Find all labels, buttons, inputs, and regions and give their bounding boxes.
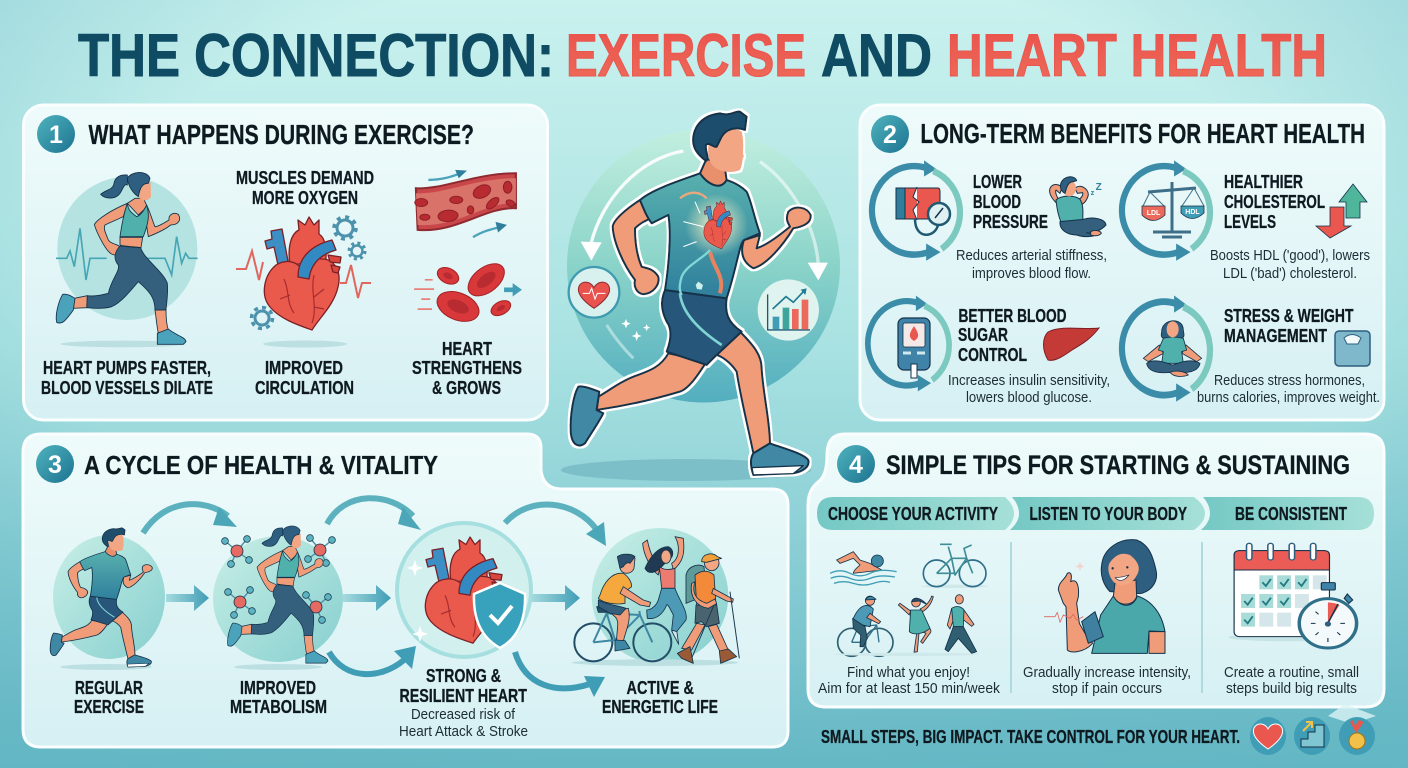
label: heart pumps faster: HEART PUMPS FASTER, [43, 357, 211, 378]
panel 1: what happens during exercise [24, 105, 548, 420]
text: find what you enjoy: Find what you enjoy! [847, 664, 970, 681]
label: heart strengthens and grows: & GROWS [432, 377, 501, 398]
tab: listen to your body: LISTEN TO YOUR BODY [1030, 504, 1187, 524]
arrow: curved 2 to 3 top [327, 498, 421, 530]
panel 2: long-term benefits [860, 105, 1384, 420]
label: muscles demand more oxygen: MORE OXYGEN [252, 187, 358, 208]
arrow: cycle right [760, 162, 828, 280]
label: improved circulation: CIRCULATION [255, 377, 354, 398]
illustration: blood vessel and blood cells [414, 170, 522, 327]
badge 3: 3 [48, 451, 62, 479]
description: decreased risk [399, 706, 528, 740]
label: improved metabolism: IMPROVED [240, 677, 316, 698]
icon: chart badge [758, 279, 819, 341]
label: improved metabolism [230, 677, 327, 717]
icon: footer heart [1250, 717, 1286, 755]
text: stress and weight: MANAGEMENT [1224, 326, 1327, 346]
label: heart strengthens and grows: STRENGTHENS [412, 357, 522, 378]
text: lower blood pressure: PRESSURE [973, 212, 1048, 232]
arrow: curved 3 to 4 bottom [515, 652, 605, 697]
text: healthier cholesterol: LEVELS [1224, 212, 1276, 232]
benefit: lower blood pressure [872, 160, 1107, 282]
arrow: curved 3 to 4 top [505, 505, 606, 546]
label: heart pumps faster: BLOOD VESSELS DILATE [41, 377, 213, 398]
description: stress and weight [1197, 372, 1380, 406]
description: better blood sugar [948, 372, 1110, 406]
label: regular exercise: EXERCISE [74, 696, 144, 717]
text: stress and weight: STRESS & WEIGHT [1224, 306, 1354, 326]
text: better blood sugar [958, 306, 1066, 365]
text: lower blood pressure: BLOOD [973, 192, 1021, 212]
panel 4: simple tips [808, 434, 1384, 707]
label: strong and resilient heart: RESILIENT HEART [400, 685, 528, 706]
icon: footer medal [1339, 717, 1375, 755]
icon: blood pressure cuff [872, 160, 960, 261]
text: gradually increase intensity: stop if pain occurs [1052, 680, 1162, 697]
description: healthier cholesterol [1210, 247, 1370, 282]
step: active and energetic life [572, 528, 739, 666]
description: better blood sugar: lowers blood glucose. [966, 389, 1092, 406]
label: regular exercise [74, 677, 144, 717]
title [78, 22, 1327, 89]
icon: balance scale: HDL [1185, 209, 1200, 216]
icon: balance scale [1122, 160, 1210, 261]
label: improved circulation: IMPROVED [265, 357, 343, 378]
text: lower blood pressure: LOWER [973, 172, 1022, 192]
icon: liver [1044, 328, 1099, 360]
badge 3 [36, 445, 74, 483]
description: better blood sugar: Increases insulin sensitivity, [948, 372, 1110, 389]
tab: choose your activity [817, 497, 1014, 530]
title: AND [821, 22, 932, 89]
step: regular exercise [50, 528, 165, 670]
label: active and energetic life: ENERGETIC LIFE [602, 696, 718, 717]
description: lower blood pressure: improves blood flow. [972, 265, 1091, 282]
heading 1: WHAT HAPPENS DURING EXERCISE? [88, 119, 474, 150]
label: active and energetic life [602, 677, 718, 717]
badge 1 [37, 115, 75, 153]
benefit: healthier cholesterol [1122, 160, 1370, 282]
icon: relaxing person: z [1091, 188, 1095, 197]
arrow: step 2 to 3 [343, 585, 391, 611]
benefit: better blood sugar [868, 296, 1110, 406]
description: stress and weight: burns calories, improves weight. [1197, 389, 1380, 406]
description: stress and weight: Reduces stress hormones, [1214, 372, 1365, 389]
badge 2 [871, 115, 909, 153]
title: THE CONNECTION: [78, 22, 554, 89]
description: lower blood pressure: Reduces arterial stiffness, [956, 247, 1107, 264]
icon: cyclist [838, 596, 893, 656]
label: strong and resilient heart: STRONG & [426, 665, 501, 686]
arrow: cycle left [581, 151, 683, 261]
label: improved circulation [255, 357, 354, 398]
label: heart strengthens and grows [412, 338, 522, 398]
icon: woman checking pulse [1044, 540, 1165, 653]
label: active and energetic life: ACTIVE & [626, 677, 694, 698]
icon: relaxing person: Z [1096, 182, 1102, 193]
panel 3: a cycle of health and vitality [23, 434, 788, 747]
badge 1: 1 [49, 121, 63, 149]
arrow: step 3 to 4 [531, 585, 580, 611]
text: gradually increase intensity [1023, 664, 1191, 697]
icon: glucose meter [868, 296, 949, 391]
icon: bathroom scale [1335, 331, 1370, 366]
text: gradually increase intensity: Gradually increase intensity, [1023, 664, 1191, 681]
icon: relaxing person [1050, 177, 1106, 237]
text: create a routine [1224, 664, 1359, 697]
illustration: woman running with ECG [56, 172, 198, 347]
description: decreased risk: Heart Attack & Stroke [399, 723, 528, 740]
text: better blood sugar: BETTER BLOOD [958, 306, 1066, 326]
figure: cyclist with bicycle [574, 554, 671, 661]
icon: swimmer [830, 552, 897, 585]
icon: footer stairs [1294, 717, 1330, 755]
label: improved metabolism: METABOLISM [230, 696, 327, 717]
badge 2: 2 [883, 121, 897, 149]
text: healthier cholesterol: CHOLESTEROL [1224, 192, 1325, 212]
label: muscles demand more oxygen [236, 167, 374, 208]
tab: listen to your body [1010, 497, 1205, 530]
text: better blood sugar: SUGAR [958, 325, 1008, 345]
label: regular exercise: REGULAR [75, 677, 143, 698]
tab: be consistent [1201, 497, 1374, 530]
text: healthier cholesterol [1224, 172, 1325, 232]
icon: glowing heart [704, 201, 732, 249]
text: better blood sugar: CONTROL [958, 345, 1027, 365]
tab: be consistent: BE CONSISTENT [1235, 504, 1347, 524]
tab: choose your activity: CHOOSE YOUR ACTIVITY [828, 504, 998, 524]
badge 4: 4 [849, 451, 863, 479]
label: heart pumps faster [41, 357, 213, 398]
title: EXERCISE [566, 22, 806, 89]
icon: meditating woman [1122, 296, 1210, 402]
description: healthier cholesterol: LDL ('bad') cholesterol. [1223, 265, 1357, 282]
text: find what you enjoy: Aim for at least 150 min/week [818, 680, 1000, 697]
arrow: step 1 to 2 [166, 585, 209, 611]
label: muscles demand more oxygen: MUSCLES DEMAND [236, 167, 374, 188]
icon: balance scale: LDL [1147, 210, 1161, 217]
figure: hiker [677, 554, 739, 663]
icons: activities [830, 544, 988, 656]
runner figure [571, 111, 811, 475]
icon: calendar and stopwatch [1228, 543, 1357, 648]
step: strong heart with shield [397, 523, 531, 657]
footer message: SMALL STEPS, BIG IMPACT. TAKE CONTROL FOR YOUR HEART. [821, 727, 1240, 747]
text: create a routine: Create a routine, small [1224, 664, 1359, 681]
step: improved metabolism [213, 526, 343, 670]
heading 3: A CYCLE OF HEALTH & VITALITY [84, 450, 438, 480]
description: healthier cholesterol: Boosts HDL ('good'), lowers [1210, 247, 1370, 264]
text: lower blood pressure [973, 172, 1048, 232]
label: heart strengthens and grows: HEART [442, 338, 493, 359]
illustration: heart with gears [236, 217, 371, 348]
badge 4 [837, 445, 875, 483]
figure: dancer [643, 537, 686, 644]
title: HEART HEALTH [947, 22, 1327, 89]
central runner illustration [561, 111, 840, 481]
arrow: curved 2 to 3 bottom [329, 646, 416, 674]
label: strong and resilient heart [400, 665, 528, 706]
arrow: curved 1 to 2 [143, 504, 237, 533]
text: healthier cholesterol: HEALTHIER [1224, 172, 1303, 192]
benefit: stress and weight [1122, 296, 1380, 406]
description: lower blood pressure [956, 247, 1107, 282]
text: stress and weight [1224, 306, 1354, 346]
icon: heart badge [569, 267, 619, 318]
icon: dancer [898, 596, 933, 652]
icon: bicycle [922, 544, 988, 588]
text: find what you enjoy [818, 664, 1000, 697]
description: decreased risk: Decreased risk of [411, 706, 516, 723]
icon: up and down arrows [1316, 184, 1367, 238]
icon: walker [945, 595, 977, 653]
text: create a routine: steps build big results [1226, 680, 1357, 697]
